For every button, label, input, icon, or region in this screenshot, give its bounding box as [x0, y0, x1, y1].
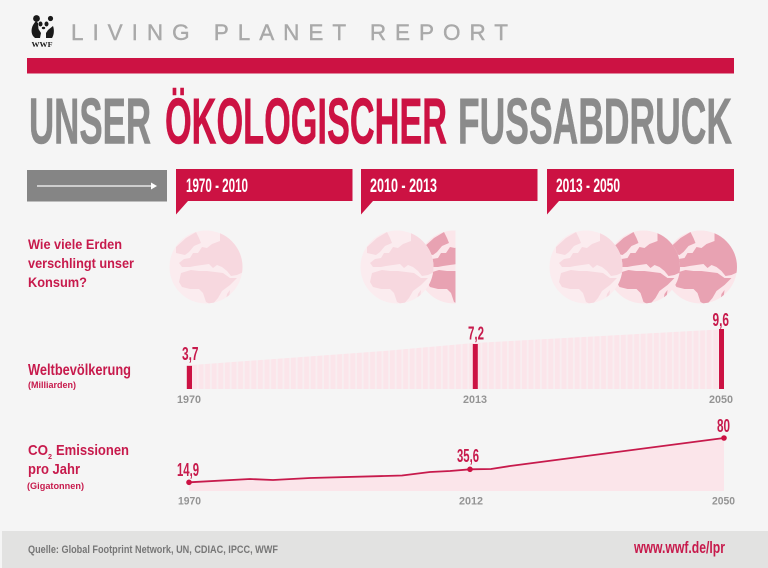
chart: population bars — [177, 310, 733, 406]
title: UNSER — [29, 86, 151, 158]
title: ÖKOLOGISCHER — [165, 86, 447, 158]
banner: 1970 - 2010: 1970 - 2010 — [186, 176, 248, 197]
chart: CO2 line: 2050 — [712, 496, 735, 508]
chart: population bars: 9,6 — [712, 310, 729, 330]
chart: population bars: 1970 — [177, 394, 201, 406]
icon: WWF panda logo — [32, 15, 54, 49]
icons: globes 2010-2013 — [360, 230, 456, 304]
label: population: Weltbevölkerung — [28, 362, 131, 379]
chart: CO2 line: 2012 — [459, 496, 483, 508]
label: CO2 emissions: CO — [28, 442, 48, 459]
label: CO2 emissions: pro Jahr — [28, 461, 80, 478]
WWF wordmark: WWF — [32, 40, 53, 49]
chart: CO2 line: 35,6 — [457, 446, 479, 466]
chart: population bars: 2013 — [463, 394, 487, 406]
label: population: (Milliarden) — [28, 380, 76, 391]
label: CO2 emissions: 2 — [48, 454, 52, 461]
arrow box — [27, 170, 167, 202]
website url: www.wwf.de/lpr — [633, 538, 725, 557]
banner: 2013 - 2050 — [547, 169, 734, 214]
label: earths question: Wie viele Erden — [28, 236, 122, 252]
footer band — [2, 531, 768, 568]
chart: population bars: 7,2 — [468, 324, 484, 344]
chart: CO2 line: 1970 — [178, 496, 201, 508]
chart: population bars: 2050 — [709, 394, 733, 406]
label: earths question: Konsum? — [28, 274, 87, 290]
icon: globe 1970-2010 — [170, 230, 246, 305]
label: earths question: verschlingt unser — [28, 255, 135, 271]
chart: population bars: 3,7 — [182, 344, 198, 364]
banner: 2010 - 2013: 2010 - 2013 — [370, 176, 437, 197]
source line: Quelle: Global Footprint Network, UN, CDIAC, IPCC, WWF — [28, 544, 278, 556]
banner: 1970 - 2010 — [176, 169, 352, 214]
label: CO2 emissions — [27, 442, 129, 492]
chart: CO2 line: 80 — [717, 416, 730, 436]
label: population — [28, 362, 131, 391]
report heading: LIVING PLANET REPORT — [71, 20, 508, 45]
chart: CO2 line — [177, 416, 735, 508]
chart: CO2 line: 14,9 — [177, 460, 199, 480]
label: CO2 emissions: (Gigatonnen) — [27, 481, 84, 492]
red top bar — [27, 58, 734, 74]
icons: globes 2013-2050 — [550, 230, 740, 305]
label: earths question — [28, 236, 135, 290]
label: CO2 emissions: Emissionen — [56, 442, 129, 459]
banner: 2013 - 2050: 2013 - 2050 — [556, 176, 620, 197]
banner: 2010 - 2013 — [361, 169, 538, 214]
